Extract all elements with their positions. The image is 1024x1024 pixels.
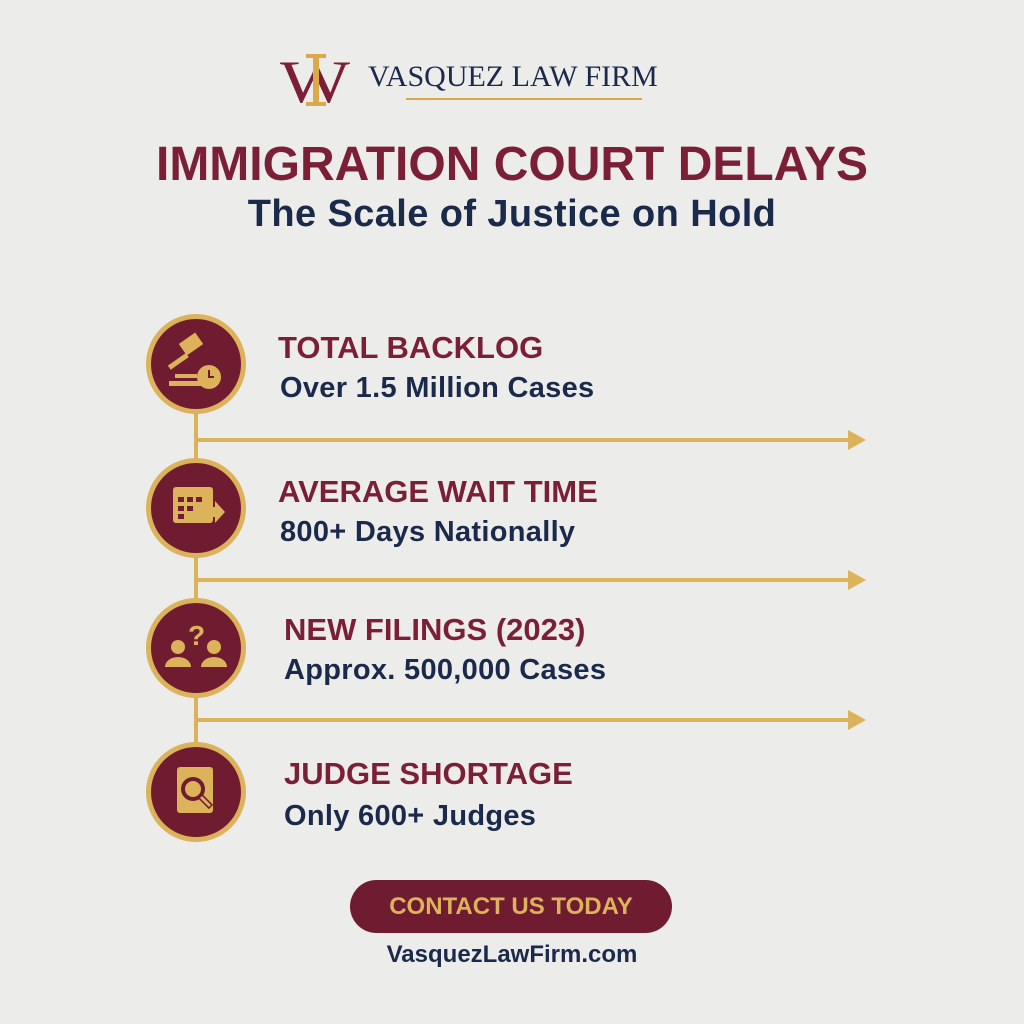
item: new filings	[146, 598, 606, 698]
item: total backlog: TOTAL BACKLOG	[278, 330, 543, 365]
button: contact us	[350, 880, 672, 933]
item: judge shortage: Only 600+ Judges	[284, 800, 536, 832]
item: average wait: 800+ Days Nationally	[280, 516, 575, 548]
title: IMMIGRATION COURT DELAYS	[156, 138, 868, 191]
item: judge shortage: JUDGE SHORTAGE	[284, 756, 573, 791]
icon: people question	[146, 598, 246, 698]
icon: gavel and clock	[146, 314, 246, 414]
item: total backlog	[146, 314, 594, 414]
website url: VasquezLawFirm.com	[387, 941, 637, 968]
item: judge shortage	[146, 742, 573, 842]
subtitle: The Scale of Justice on Hold	[248, 193, 776, 235]
item: average wait	[146, 458, 598, 558]
button: contact us: CONTACT US TODAY	[389, 893, 633, 920]
item: new filings: NEW FILINGS (2023)	[284, 612, 585, 647]
item: total backlog: Over 1.5 Million Cases	[280, 372, 594, 404]
item: new filings: Approx. 500,000 Cases	[284, 654, 606, 686]
icon: calendar	[146, 458, 246, 558]
item: average wait: AVERAGE WAIT TIME	[278, 474, 598, 509]
logo	[280, 50, 658, 110]
firm name: VASQUEZ LAW FIRM	[368, 60, 658, 93]
icon: people question: ?	[188, 620, 205, 651]
icon: document magnifier	[146, 742, 246, 842]
